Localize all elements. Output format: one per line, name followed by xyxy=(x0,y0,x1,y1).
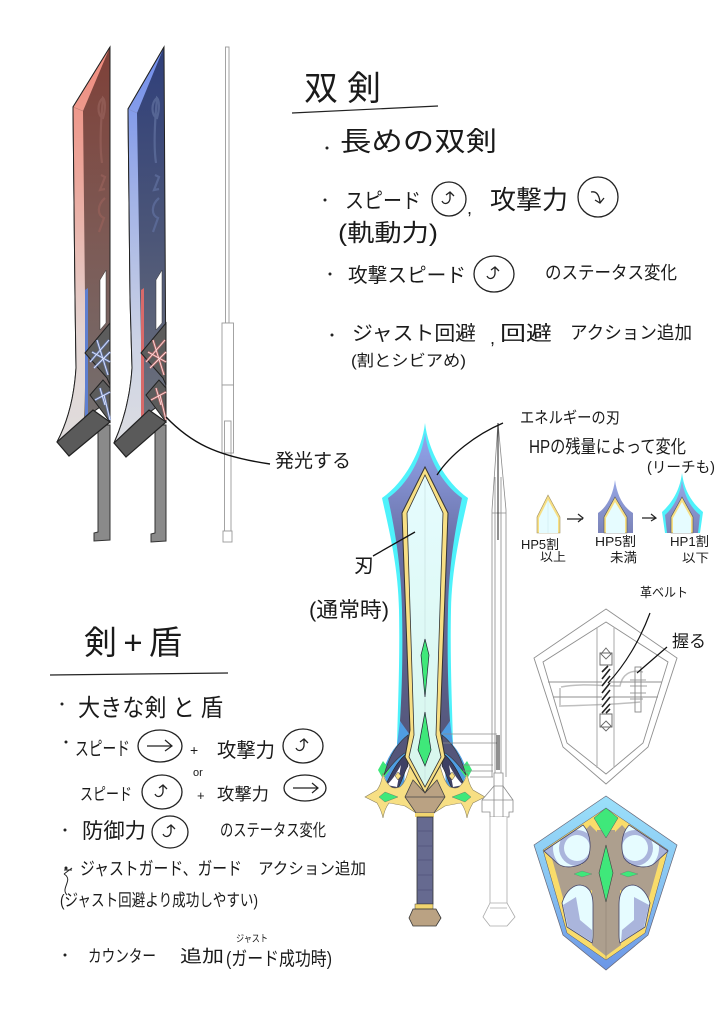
caption: HP 50 up xyxy=(521,537,566,564)
shield top-left pane xyxy=(544,824,590,868)
red blade bevel xyxy=(57,47,110,442)
blade core xyxy=(407,475,443,787)
blue blade emblem plates xyxy=(141,323,166,422)
shield side gems xyxy=(574,871,638,877)
note: just dodge action: アクション追加 xyxy=(570,323,692,343)
sword: blue twin blade xyxy=(114,47,166,542)
note: counter added: (ガード成功時) xyxy=(226,948,332,970)
leader line: grip xyxy=(637,647,667,673)
sword: line-art twin blade xyxy=(222,47,234,542)
note: speed flat attack up: + xyxy=(190,742,198,758)
note: fairly strict: (割とシビアめ) xyxy=(351,352,466,370)
section: twin swords notes xyxy=(292,70,692,370)
blue blade slot xyxy=(156,270,162,330)
red blade emblem plates xyxy=(85,323,110,422)
blue blade glowing marks xyxy=(146,340,166,420)
note: or alternative xyxy=(80,767,326,809)
belt bracket top xyxy=(600,648,612,665)
caption: HP 50 up: HP5割 xyxy=(521,537,559,552)
note: or alternative: 攻撃力 xyxy=(217,785,269,804)
guard base strip xyxy=(415,813,434,817)
heading: sword plus shield: 剣 + 盾 xyxy=(84,624,182,661)
blue blade guard xyxy=(114,410,166,457)
note: defense up xyxy=(64,816,326,848)
note: defense up: のステータス変化 xyxy=(220,821,326,840)
note: attack speed status: のステータス変化 xyxy=(545,263,677,283)
shield top-right pane xyxy=(621,824,668,868)
blade aura and guard, left half xyxy=(365,423,425,818)
red blade slot xyxy=(100,270,106,330)
label: normal state: (通常時) xyxy=(309,599,389,622)
label: energy blade: エネルギーの刃 xyxy=(520,409,620,427)
lower gem xyxy=(418,712,431,766)
caption: HP 10 under: 以下 xyxy=(682,551,709,565)
note: counter added: カウンター xyxy=(88,947,156,966)
label: leather belt: 革ベルト xyxy=(640,585,688,600)
leader line: leather belt xyxy=(608,613,650,683)
shield center gem xyxy=(599,845,613,902)
blue blade accent line xyxy=(141,288,144,418)
label: reach too: (リーチも) xyxy=(647,459,715,476)
shield bottom-left pane xyxy=(562,885,593,943)
caption: HP 50 under: 未満 xyxy=(610,550,637,565)
note: or alternative: + xyxy=(197,788,205,803)
leader line: blade normal xyxy=(373,532,415,556)
note: just dodge action: ジャスト回避 xyxy=(352,322,476,345)
grip xyxy=(417,817,433,904)
pommel collar plate xyxy=(405,780,445,813)
handle bar xyxy=(635,667,641,712)
note: just guard action xyxy=(64,859,366,879)
shield bottom-right pane xyxy=(619,885,650,943)
caption: HP 50 under: HP5割 xyxy=(595,534,636,549)
note: long twin swords: 長めの双剣 xyxy=(340,127,497,157)
pommel xyxy=(409,904,441,926)
shield back line art xyxy=(534,609,677,784)
sword: energy greatsword xyxy=(365,423,485,926)
note: counter added: 追加 xyxy=(180,947,224,966)
note: speed up attack down: スピード xyxy=(345,190,421,213)
red blade runes xyxy=(98,98,105,232)
note: big sword and shield: 大きな剣 と 盾 xyxy=(78,695,223,722)
label: glows: 発光する xyxy=(275,450,351,472)
note: or alternative: スピード xyxy=(80,785,132,804)
blade center line xyxy=(424,480,426,780)
caption: HP 10 under xyxy=(670,534,709,565)
caption: HP 50 up: 以上 xyxy=(540,550,566,564)
line art guard xyxy=(482,773,513,817)
note: speed flat attack up: スピード xyxy=(75,739,130,760)
note: attack speed status: 攻撃スピード xyxy=(348,264,466,287)
upper gem xyxy=(421,639,429,697)
blue blade body xyxy=(114,47,166,443)
arrow: curved from note xyxy=(64,868,72,895)
note: speed up attack down: , xyxy=(467,198,472,218)
note: defense up: 防御力 xyxy=(82,820,146,843)
blue blade runes xyxy=(152,98,159,232)
note: speed up attack down xyxy=(324,177,618,218)
line art grip and pommel xyxy=(483,817,515,926)
note: speed flat attack up xyxy=(64,729,323,763)
arrow: stage 1 to 2 xyxy=(567,514,583,522)
section: sword and shield notes xyxy=(50,624,366,970)
blade stage: HP below half xyxy=(598,480,633,533)
sword: red twin blade xyxy=(57,47,110,541)
note: easier than just dodge: (ジャスト回避より成功しやすい) xyxy=(60,891,258,910)
red blade body xyxy=(57,47,110,442)
label: blade: 刃 xyxy=(354,555,374,577)
red blade outline xyxy=(57,47,110,442)
note: counter added xyxy=(64,934,332,970)
shield top gem xyxy=(594,808,618,838)
note: counter added: ジャスト xyxy=(236,934,268,945)
sketch of arm xyxy=(560,671,647,707)
note: attack speed status xyxy=(328,256,677,292)
caption: HP 10 under: HP1割 xyxy=(670,534,709,549)
blue blade tang xyxy=(151,425,166,542)
label: grip: 握る xyxy=(672,632,706,651)
caption: HP 50 under xyxy=(595,534,637,565)
belt bracket bottom xyxy=(600,714,612,731)
note: or alternative: or xyxy=(193,767,203,779)
red blade guard xyxy=(57,410,110,456)
shield yellow inlay xyxy=(543,808,668,960)
heading underline xyxy=(50,673,228,675)
note: just guard action: アクション追加 xyxy=(258,860,366,878)
shield tan cross xyxy=(551,825,661,956)
note: just dodge action: , xyxy=(490,328,495,348)
sword: energy greatsword line art xyxy=(443,423,515,926)
blade stage: HP above half xyxy=(537,495,560,533)
note: speed flat attack up: 攻撃力 xyxy=(217,739,275,762)
blue blade outline xyxy=(114,47,164,443)
note: mobility: (軌動力) xyxy=(338,220,438,247)
note: just dodge action xyxy=(330,322,692,348)
note: speed up attack down: 攻撃力 xyxy=(490,185,568,215)
blue blade bevel xyxy=(114,47,164,443)
arrow: stage 2 to 3 xyxy=(642,514,656,521)
red blade accent line xyxy=(85,288,88,418)
heading underline xyxy=(292,106,438,113)
leader line: glowing parts xyxy=(166,417,270,464)
note: just guard action: ジャストガード、ガード xyxy=(80,859,242,879)
hatched belt xyxy=(602,666,610,713)
shield: colored front xyxy=(534,796,677,970)
line art dark center xyxy=(497,423,499,770)
label: changes by HP: HPの残量によって変化 xyxy=(529,437,686,457)
red blade glowing marks xyxy=(90,340,110,420)
red blade tang xyxy=(94,425,110,541)
leader line: energy blade xyxy=(437,423,503,475)
blade stage: HP below 10 percent xyxy=(662,473,703,533)
note: just dodge action: 回避 xyxy=(500,322,552,345)
blade aura and guard, right half xyxy=(425,423,485,818)
blade rim xyxy=(402,467,448,793)
shield rim xyxy=(534,796,677,970)
heading: twin swords: 双剣 xyxy=(304,70,381,108)
